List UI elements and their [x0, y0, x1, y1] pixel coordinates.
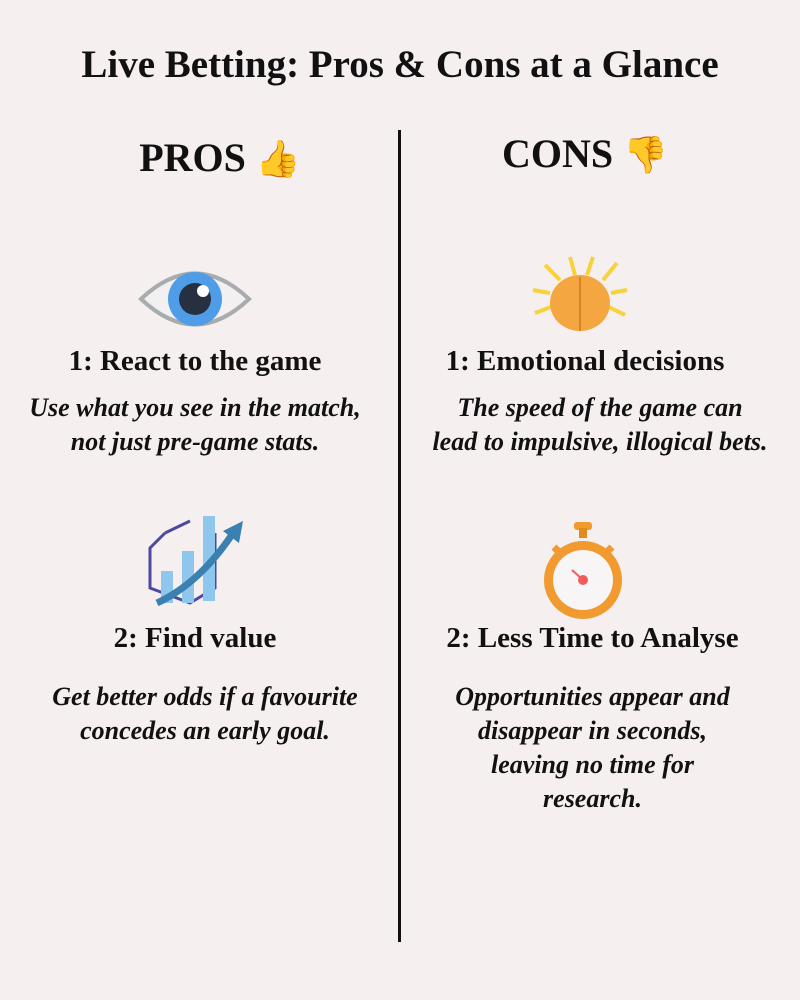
- text: con 2: [455, 682, 730, 813]
- heading: con 2: 2: Less Time to Analyse: [446, 622, 739, 654]
- heading: pro 2: 2: Find value: [114, 622, 276, 654]
- text: con 1: [432, 393, 768, 456]
- heading: cons: CONS 👎: [502, 131, 668, 176]
- icon: stopwatch: [544, 522, 622, 619]
- text: con 2: disappear in seconds,: [478, 716, 707, 745]
- text: pro 1: Use what you see in the match,: [29, 393, 361, 422]
- text: con 2: leaving no time for: [491, 750, 694, 779]
- text: con 1: The speed of the game can: [457, 393, 743, 422]
- heading: con 1: 1: Emotional decisions: [446, 345, 724, 377]
- heading: pro 1: 1: React to the game: [69, 345, 321, 377]
- text: pro 1: [29, 393, 361, 456]
- text: con 2: Opportunities appear and: [455, 682, 730, 711]
- text: pro 1: not just pre-game stats.: [71, 427, 319, 456]
- text: pro 2: [52, 682, 358, 745]
- text: pro 2: concedes an early goal.: [80, 716, 330, 745]
- heading: pros: PROS 👍: [139, 135, 301, 180]
- icon: eye: [138, 271, 252, 327]
- text: pro 2: Get better odds if a favourite: [52, 682, 358, 711]
- title: Live Betting: Pros & Cons at a Glance: [81, 43, 719, 86]
- text: con 1: lead to impulsive, illogical bets.: [432, 427, 768, 456]
- divider: [398, 130, 401, 942]
- text: con 2: research.: [543, 784, 642, 813]
- icon: brain: [532, 256, 628, 331]
- icon: chart: [148, 516, 243, 606]
